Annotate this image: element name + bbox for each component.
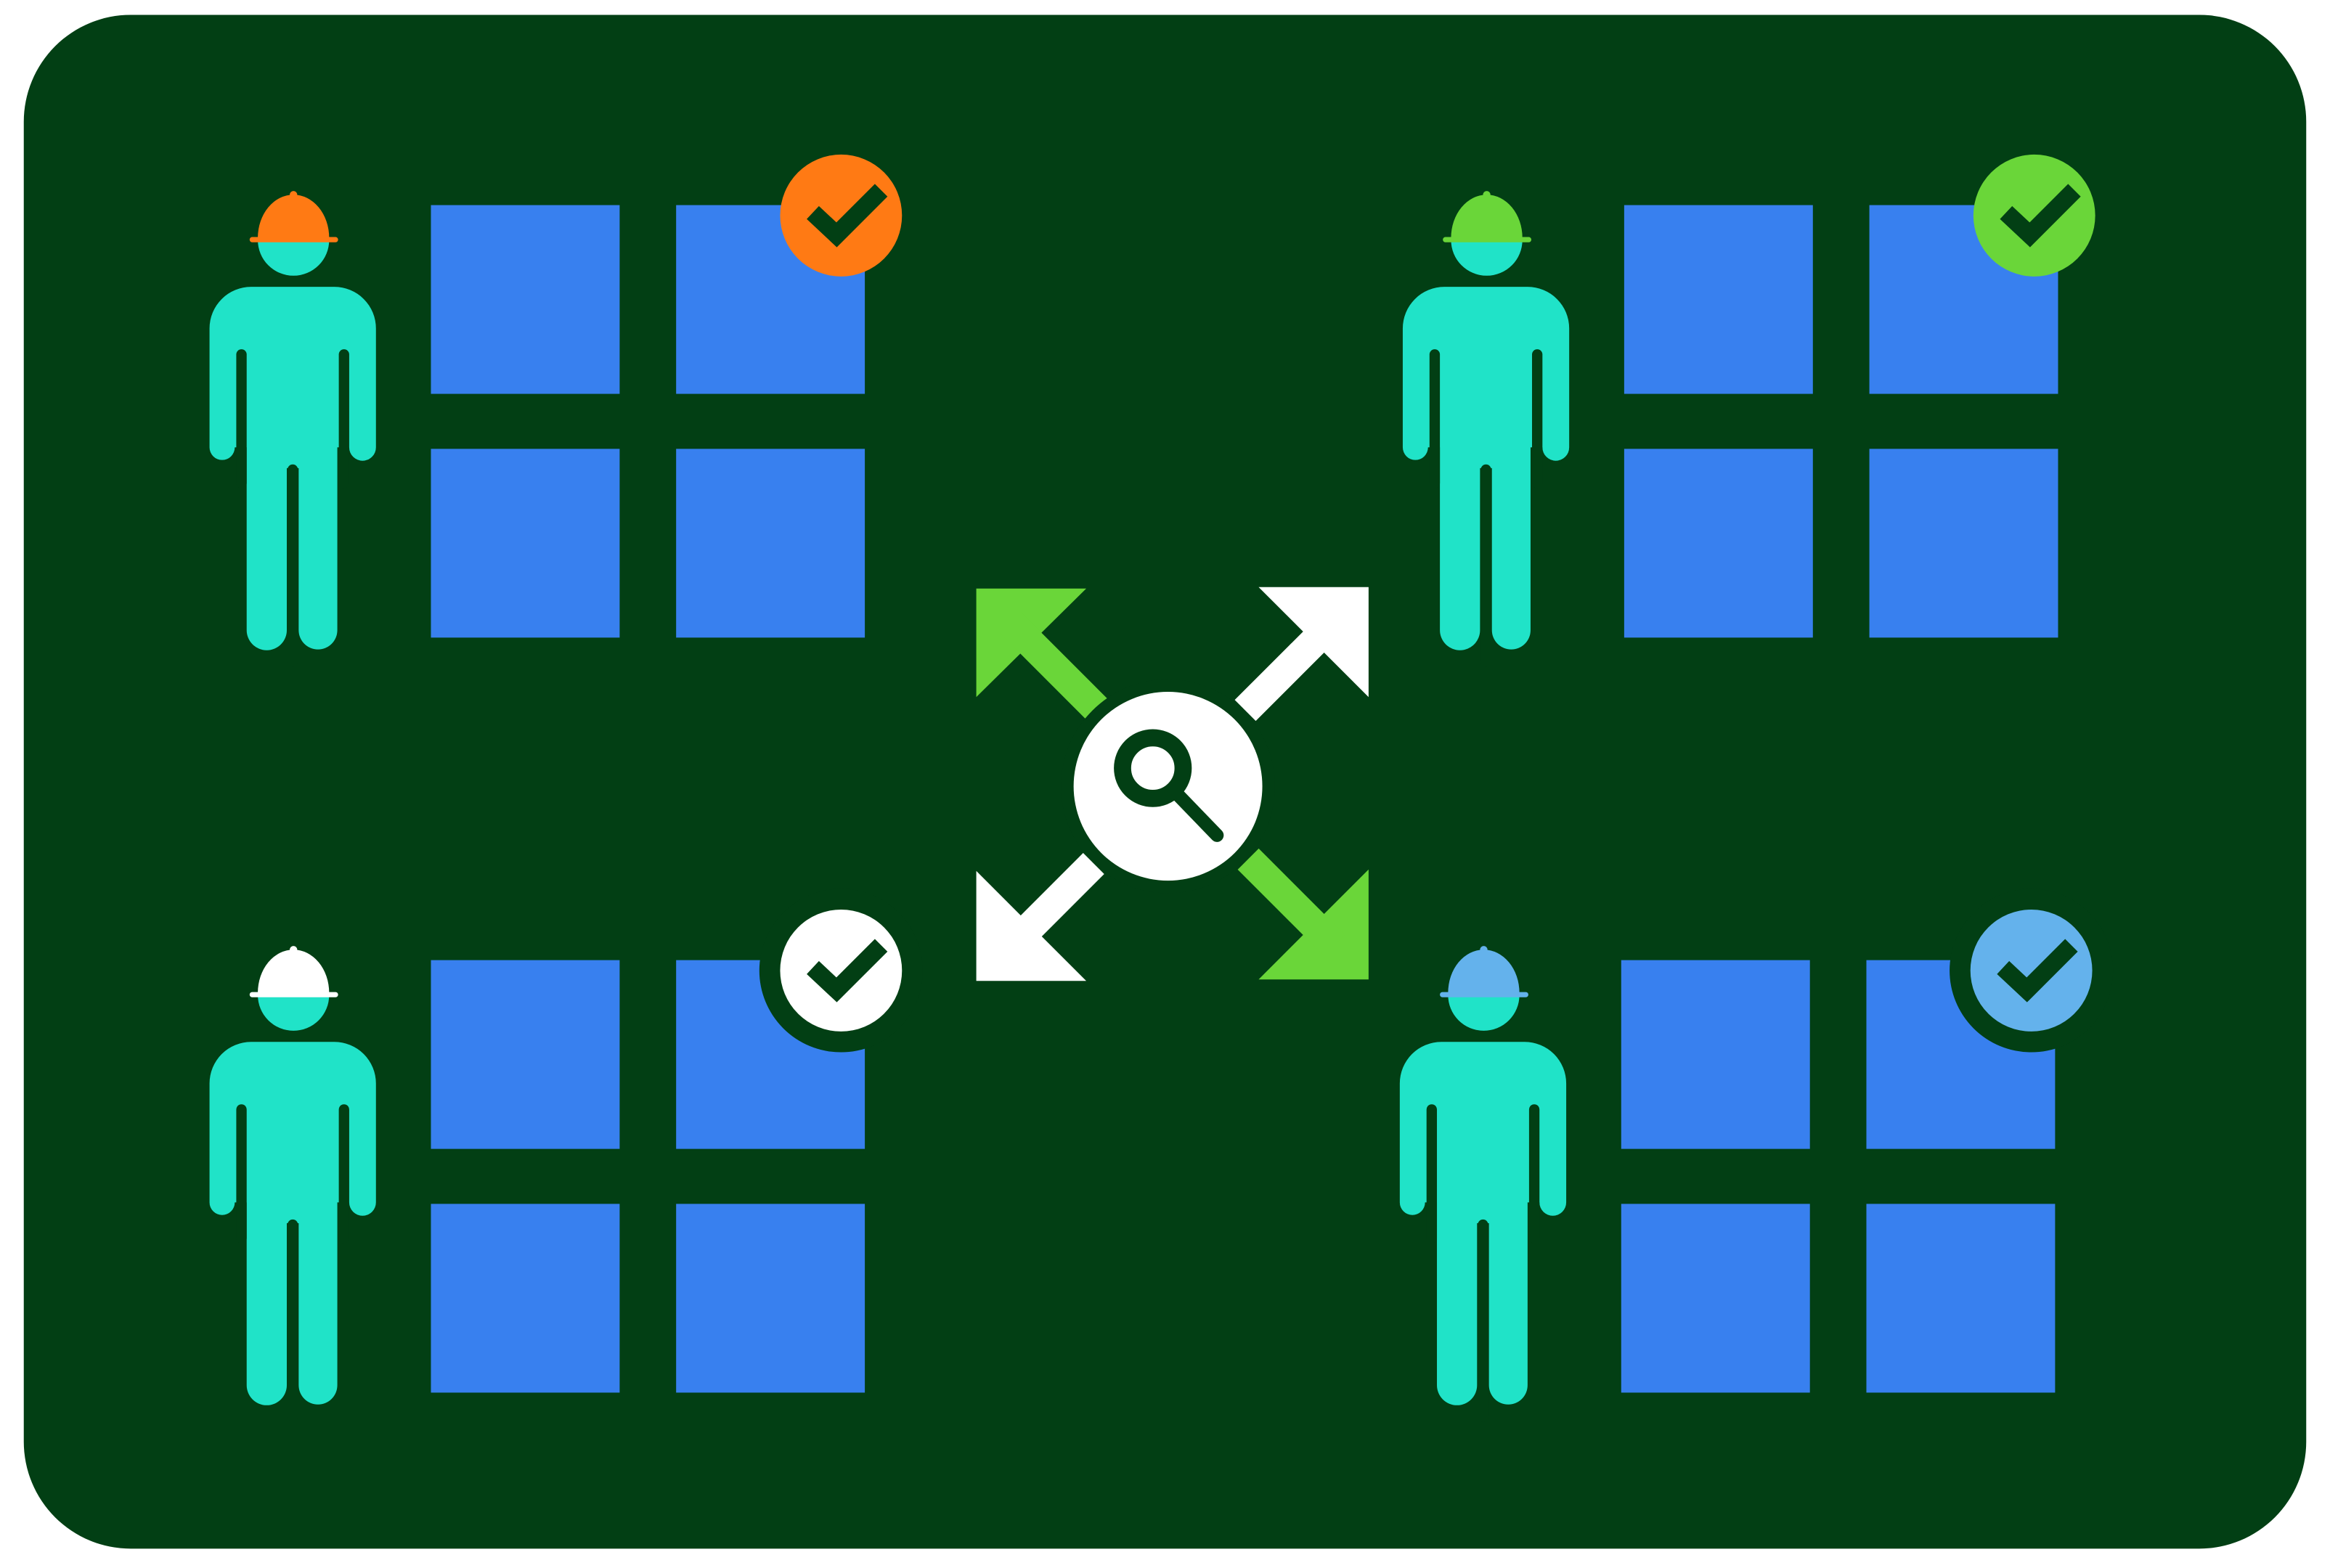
- icon: worker: [1400, 946, 1566, 1416]
- squares grid: [431, 960, 865, 1392]
- squares grid: [1624, 205, 2058, 637]
- icon: check badge: [759, 889, 923, 1053]
- panel: top-left worker group: [210, 155, 902, 661]
- arrow: south-east: [1248, 859, 1369, 979]
- center: arrows and search: [977, 587, 1369, 981]
- icon: worker: [210, 946, 376, 1416]
- squares grid: [431, 205, 865, 637]
- icon: check badge: [1973, 155, 2095, 277]
- squares grid: [1621, 960, 2055, 1392]
- arrow: north-west: [977, 589, 1096, 709]
- icon: check badge: [1950, 889, 2113, 1053]
- arrow: south-west: [977, 864, 1093, 981]
- icon: worker: [210, 191, 376, 661]
- icon: magnifier circle: [1061, 679, 1275, 893]
- icon: check badge: [780, 155, 902, 277]
- panel: bottom-left worker group: [210, 889, 923, 1416]
- arrow: north-east: [1245, 587, 1369, 711]
- panel: bottom-right worker group: [1400, 889, 2113, 1416]
- panel: top-right worker group: [1403, 155, 2095, 661]
- icon: worker: [1403, 191, 1569, 661]
